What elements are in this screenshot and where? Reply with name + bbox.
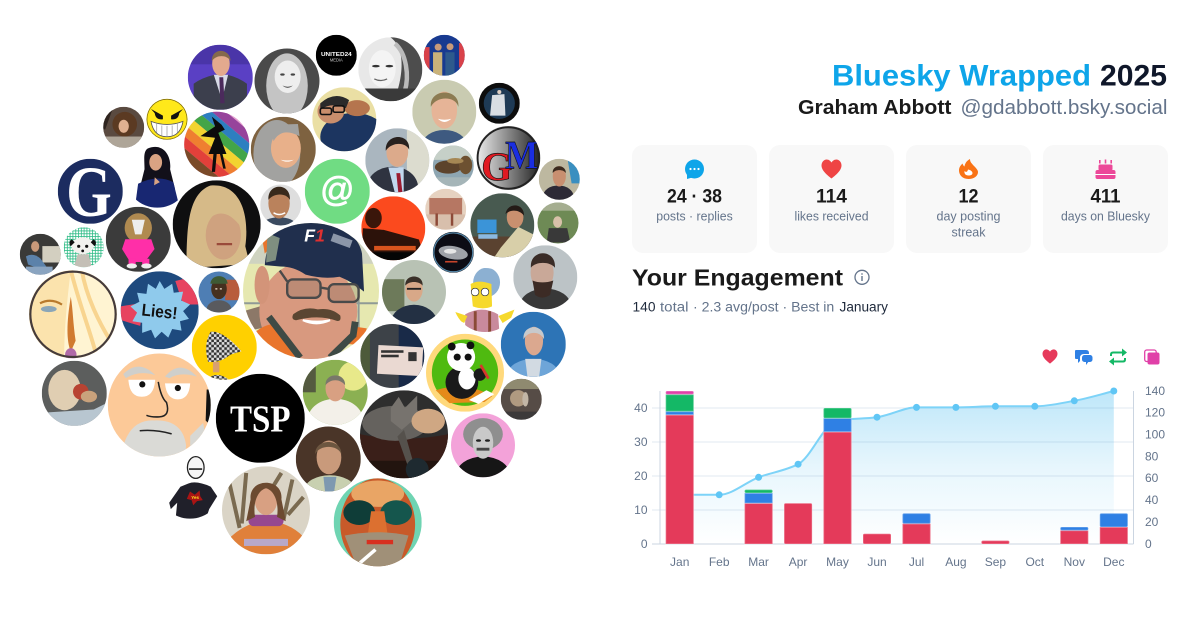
avatar: man in white shirt bbox=[302, 360, 368, 425]
bar: May bbox=[824, 408, 852, 544]
avatar: main F1 cap man bbox=[243, 222, 379, 362]
cumulative area bbox=[680, 391, 1114, 544]
avatar: man with glasses hugging bbox=[312, 87, 376, 152]
avatar cluster bbox=[20, 35, 580, 571]
month labels: Mar bbox=[748, 555, 769, 569]
heading: your engagement: Your Engagement bbox=[632, 265, 843, 291]
avatar: blonde portrait monochrome bbox=[254, 48, 320, 118]
month labels: Apr bbox=[789, 555, 807, 569]
engagement summary: January bbox=[840, 300, 888, 315]
icon: heart bbox=[822, 160, 842, 178]
avatar: man with cap bbox=[198, 272, 240, 319]
stat card: likes received bbox=[769, 145, 894, 253]
avatar: man in suit with red tie bbox=[365, 128, 430, 192]
stat card: posting streak: 12 bbox=[958, 186, 978, 207]
avatar: green at sign: @ bbox=[320, 171, 354, 209]
engagement summary: · 2.3 avg/post · Best in bbox=[693, 300, 834, 315]
title: 2025 bbox=[1100, 60, 1167, 93]
avatar: sticker patch bbox=[433, 232, 474, 273]
avatar: United24 Media logo bbox=[316, 35, 357, 76]
panel: stat cards bbox=[632, 145, 1168, 253]
month labels: Jun bbox=[867, 555, 887, 569]
right axis labels: 120 bbox=[1145, 406, 1165, 420]
avatar: two people with flags bbox=[424, 35, 465, 76]
avatar: green at sign bbox=[305, 159, 370, 224]
month labels: May bbox=[826, 555, 849, 569]
user name and handle: Graham Abbott bbox=[798, 97, 952, 119]
right axis labels: 100 bbox=[1145, 428, 1165, 442]
avatar: cats on table bbox=[360, 390, 448, 481]
avatar: man close up bbox=[260, 184, 301, 226]
avatar: smiling man bbox=[412, 80, 476, 144]
right axis labels: 140 bbox=[1145, 384, 1165, 398]
left axis labels: 20 bbox=[634, 469, 648, 483]
avatar: woman in orange sweater bbox=[222, 466, 310, 554]
avatar: illustrated man with sunglasses and cigarette bbox=[334, 478, 422, 571]
bar: December bbox=[1100, 513, 1128, 544]
cumulative line bbox=[680, 388, 1117, 498]
bar: July bbox=[902, 513, 930, 544]
avatar: blonde woman on black bbox=[173, 180, 261, 268]
avatar: man with laptop bbox=[470, 193, 534, 257]
avatar: GM logo: G bbox=[481, 144, 512, 189]
icon: likes bbox=[1042, 349, 1058, 364]
stat card: posts and replies bbox=[632, 145, 757, 253]
right axis labels: 80 bbox=[1145, 450, 1159, 464]
avatar: patterned hood on yellow bbox=[192, 315, 257, 380]
month labels: Oct bbox=[1025, 555, 1045, 569]
chart legend icons bbox=[1042, 348, 1160, 366]
stat card: days on Bluesky bbox=[1043, 145, 1168, 253]
avatar: Marge cartoon bbox=[453, 268, 517, 332]
month labels: Jan bbox=[670, 555, 689, 569]
grid lines bbox=[652, 408, 1134, 510]
avatar: G logo: G bbox=[66, 152, 112, 232]
right axis labels: 0 bbox=[1145, 537, 1152, 551]
avatar: Einstein on pink bbox=[451, 413, 515, 478]
left axis labels: 10 bbox=[634, 503, 648, 517]
month labels: Nov bbox=[1064, 555, 1085, 569]
stacked bars bbox=[666, 391, 1128, 544]
chart: monthly engagement bbox=[634, 384, 1165, 569]
stat card: posting streak: day posting bbox=[936, 210, 1001, 224]
avatar: red orange scene bbox=[361, 196, 425, 260]
avatar: small pet photo bbox=[501, 379, 542, 420]
icon: reposts bbox=[1109, 348, 1127, 366]
engagement summary: 140 bbox=[632, 300, 656, 315]
avatar: ink drawn man bbox=[158, 455, 222, 519]
avatar: rainbow silhouette bbox=[184, 112, 250, 177]
avatar: woman with brown hair bbox=[103, 107, 144, 148]
avatar: woman in navy suit bbox=[136, 146, 178, 208]
avatar: man with blue background bbox=[538, 158, 580, 200]
avatar: bearded man bbox=[513, 245, 578, 310]
avatar: GM logo bbox=[476, 126, 540, 190]
avatar: ballet dancer bbox=[479, 83, 520, 124]
avatar: host in suit bbox=[188, 45, 253, 110]
avatar: man on blue background bbox=[500, 312, 566, 377]
bar: June bbox=[863, 534, 891, 544]
avatar: Lies badge: Lies! bbox=[141, 299, 178, 323]
icon: replies bbox=[1075, 350, 1092, 365]
stat card: likes received: 114 bbox=[816, 186, 847, 207]
avatar: man in blue shirt bbox=[20, 234, 61, 275]
avatar: sepia group photo bbox=[425, 189, 466, 230]
month labels: Dec bbox=[1103, 555, 1124, 569]
avatar: blonde illustration bbox=[29, 270, 117, 361]
bar: March bbox=[745, 490, 773, 544]
icon: info bbox=[855, 270, 869, 284]
month labels: Jul bbox=[909, 555, 924, 569]
title: Bluesky Wrapped bbox=[832, 60, 1091, 93]
icon: quotes bbox=[1145, 350, 1160, 364]
month labels: Aug bbox=[945, 555, 967, 569]
bar: April bbox=[784, 503, 812, 544]
right axis labels: 20 bbox=[1145, 515, 1159, 529]
avatar: man with glasses by water bbox=[382, 260, 446, 324]
stat card: posts and replies: posts · replies bbox=[656, 210, 733, 224]
bar: September bbox=[981, 541, 1009, 544]
icon: birthday cake bbox=[1096, 160, 1116, 179]
month labels bbox=[670, 555, 1124, 569]
bar: November bbox=[1060, 527, 1088, 544]
avatar: monochrome woman bbox=[358, 37, 422, 101]
avatar: panda bbox=[426, 334, 504, 412]
avatar: GM logo: M bbox=[505, 133, 538, 178]
left axis labels bbox=[634, 401, 648, 551]
avatar: yellow smiley bbox=[146, 99, 188, 140]
stat card: days on Bluesky: days on Bluesky bbox=[1061, 210, 1151, 224]
icon: flame bbox=[959, 159, 978, 179]
avatar: dalmatian bbox=[64, 227, 104, 267]
avatar: United24 Media logo: MEDIA bbox=[330, 57, 343, 62]
avatar: dog in pink suit bbox=[106, 207, 171, 272]
engagement summary bbox=[632, 300, 888, 315]
avatar: woman with grey hair bbox=[251, 117, 316, 188]
stat card: likes received: likes received bbox=[794, 210, 869, 224]
user name and handle: @gdabbott.bsky.social bbox=[960, 97, 1168, 119]
month labels: Feb bbox=[709, 555, 730, 569]
left axis labels: 40 bbox=[634, 401, 648, 415]
avatar: main F1 cap man: F1 bbox=[304, 225, 325, 245]
right axis labels: 40 bbox=[1145, 493, 1159, 507]
left axis labels: 30 bbox=[634, 435, 648, 449]
stat card: days on Bluesky: 411 bbox=[1090, 186, 1121, 207]
stat card: posting streak: streak bbox=[952, 226, 986, 240]
month labels: Sep bbox=[985, 555, 1006, 569]
right axis labels bbox=[1145, 384, 1165, 551]
avatar: grumpy bald cartoon bbox=[108, 354, 211, 456]
user name and handle bbox=[798, 97, 1168, 119]
avatar: United24 Media logo: UNITED24 bbox=[321, 52, 353, 58]
avatar: man outdoors bbox=[538, 202, 578, 244]
icon: chat bubble bbox=[685, 160, 704, 179]
avatar: poster on pole bbox=[360, 324, 424, 388]
avatar: man on dark brown background bbox=[296, 426, 361, 492]
stat card: posting streak bbox=[906, 145, 1031, 253]
bar: January bbox=[666, 391, 694, 544]
stat card: posts and replies: 24 · 38 bbox=[667, 186, 722, 207]
avatar: TSP logo: TSP bbox=[230, 399, 291, 441]
avatar: ink drawn man: Yes bbox=[191, 495, 199, 500]
avatar: poodle bbox=[42, 361, 107, 426]
left axis labels: 0 bbox=[641, 537, 648, 551]
engagement summary: total bbox=[660, 300, 688, 315]
avatar: TSP logo bbox=[216, 374, 305, 463]
avatar: Lies badge bbox=[121, 271, 199, 349]
avatar: bronze sculpture bbox=[433, 146, 474, 186]
right axis labels: 60 bbox=[1145, 471, 1159, 485]
